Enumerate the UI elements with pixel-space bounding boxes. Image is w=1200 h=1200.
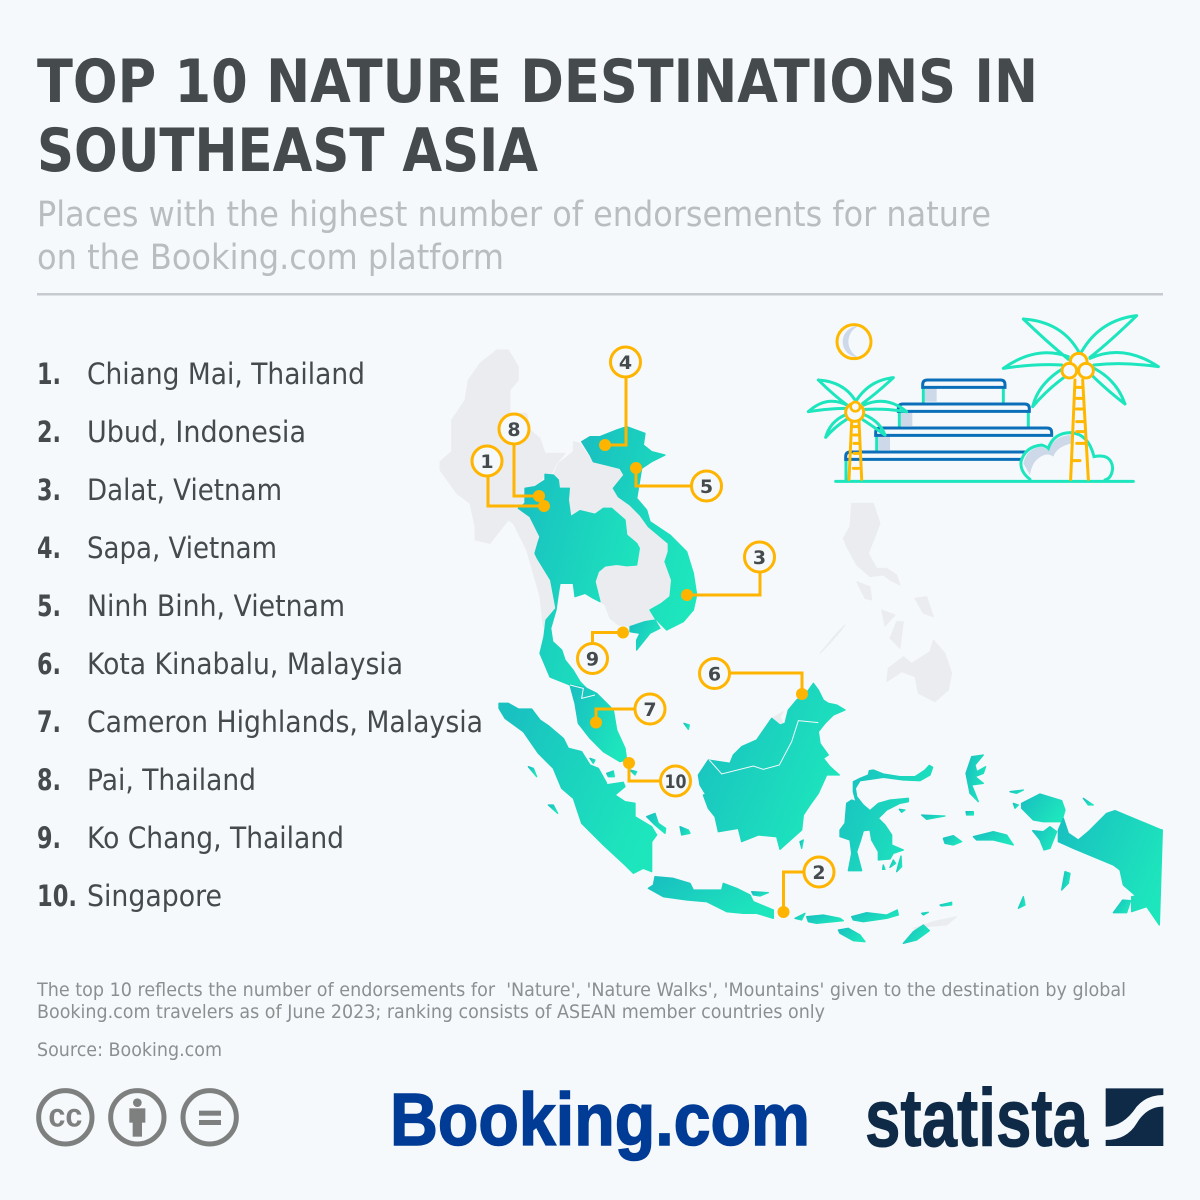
pin 6: Kota Kinabalu [700,658,808,700]
pin 7: Cameron Highlands [590,694,665,728]
pin 1: Chiang Mai: 1 [480,451,494,473]
icon: attribution person [111,1091,164,1144]
logo: Booking.com: Booking.com [390,1078,810,1161]
title: SOUTHEAST ASIA [37,116,538,186]
list item 9: 9. [37,821,61,855]
icon: no derivatives [183,1091,236,1144]
Philippines and eastern Indonesian islands [820,503,1013,943]
New Guinea [1010,790,1162,925]
icon: cc: cc [48,1098,82,1135]
logo: Statista: statista [865,1073,1089,1164]
icon: moon [837,325,871,359]
pin 9: Ko Chang: 9 [586,648,599,670]
list item 9: Ko Chang, Thailand [87,821,344,855]
pin 4: Sapa [599,347,640,451]
footnote [36,979,1126,1023]
Borneo [698,683,845,849]
footnote: Booking.com travelers as of June 2023; ranking consists of ASEAN member countries only [37,1001,825,1023]
list item 8: Pai, Thailand [87,763,256,797]
pin 3: Dalat: 3 [753,547,766,569]
pin 2: Ubud [778,857,834,918]
temple steps [846,380,1052,480]
list item 10 [37,879,222,913]
list item 6: 6. [37,647,61,681]
Peninsular Malaysia and Java [570,685,843,923]
list item 2: 2. [37,415,61,449]
subtitle [37,195,991,278]
pin 9: Ko Chang [578,626,629,674]
pin 8: Pai: 8 [507,419,521,441]
ground line [836,477,1133,486]
pin 7: Cameron Highlands: 7 [643,699,657,721]
pin 3: Dalat [681,542,774,601]
list item 5: Ninh Binh, Vietnam [87,589,345,623]
list item 10: Singapore [87,879,222,913]
icon: small palm [808,378,907,479]
creative commons icons [39,1091,236,1144]
Thailand, Laos, Cambodia, Vietnam [518,427,697,697]
icon: temple with palm trees [808,316,1158,481]
Sumatra [499,703,666,873]
pin 1: Chiang Mai [472,446,550,512]
subtitle: Places with the highest number of endorsements for nature [37,195,991,235]
list item 2: Ubud, Indonesia [87,415,306,449]
Myanmar [440,350,565,627]
list item 5: 5. [37,589,61,623]
list item 8: 8. [37,763,61,797]
icon: cc [39,1091,92,1144]
pin 5: Ninh Binh: 5 [700,476,713,498]
title [37,47,1038,186]
pin 10: Singapore: 10 [664,771,686,793]
source: Source: Booking.com [37,1039,222,1061]
list item 3: Dalat, Vietnam [87,473,282,507]
list item 1: 1. [37,357,61,391]
list item 6: Kota Kinabalu, Malaysia [87,647,403,681]
icon: large palm [1003,316,1158,479]
list item 7: 7. [37,705,61,739]
ranked list of destinations [37,357,483,913]
title: TOP 10 NATURE DESTINATIONS IN [37,47,1038,117]
list item 1: Chiang Mai, Thailand [87,357,365,391]
pin 4: Sapa: 4 [619,352,632,374]
pin 2: Ubud: 2 [812,862,826,884]
pin 10: Singapore [623,757,690,796]
list item 3: 3. [37,473,61,507]
footnote: The top 10 reflects the number of endorsements for 'Nature', 'Nature Walks', 'Mountains' given to the destination by global [36,979,1126,1001]
subtitle: on the Booking.com platform [37,238,504,278]
pin 8: Pai [499,414,545,502]
Sulawesi [840,765,933,872]
pin 5: Ninh Binh [630,462,722,501]
map of Southeast Asia [440,347,1162,943]
list item 10: 10. [37,879,77,913]
icon: bush [1021,433,1113,480]
list item 4: 4. [37,531,61,565]
list item 7: Cameron Highlands, Malaysia [87,705,483,739]
list item 4: Sapa, Vietnam [87,531,277,565]
pin 6: Kota Kinabalu: 6 [708,664,721,686]
